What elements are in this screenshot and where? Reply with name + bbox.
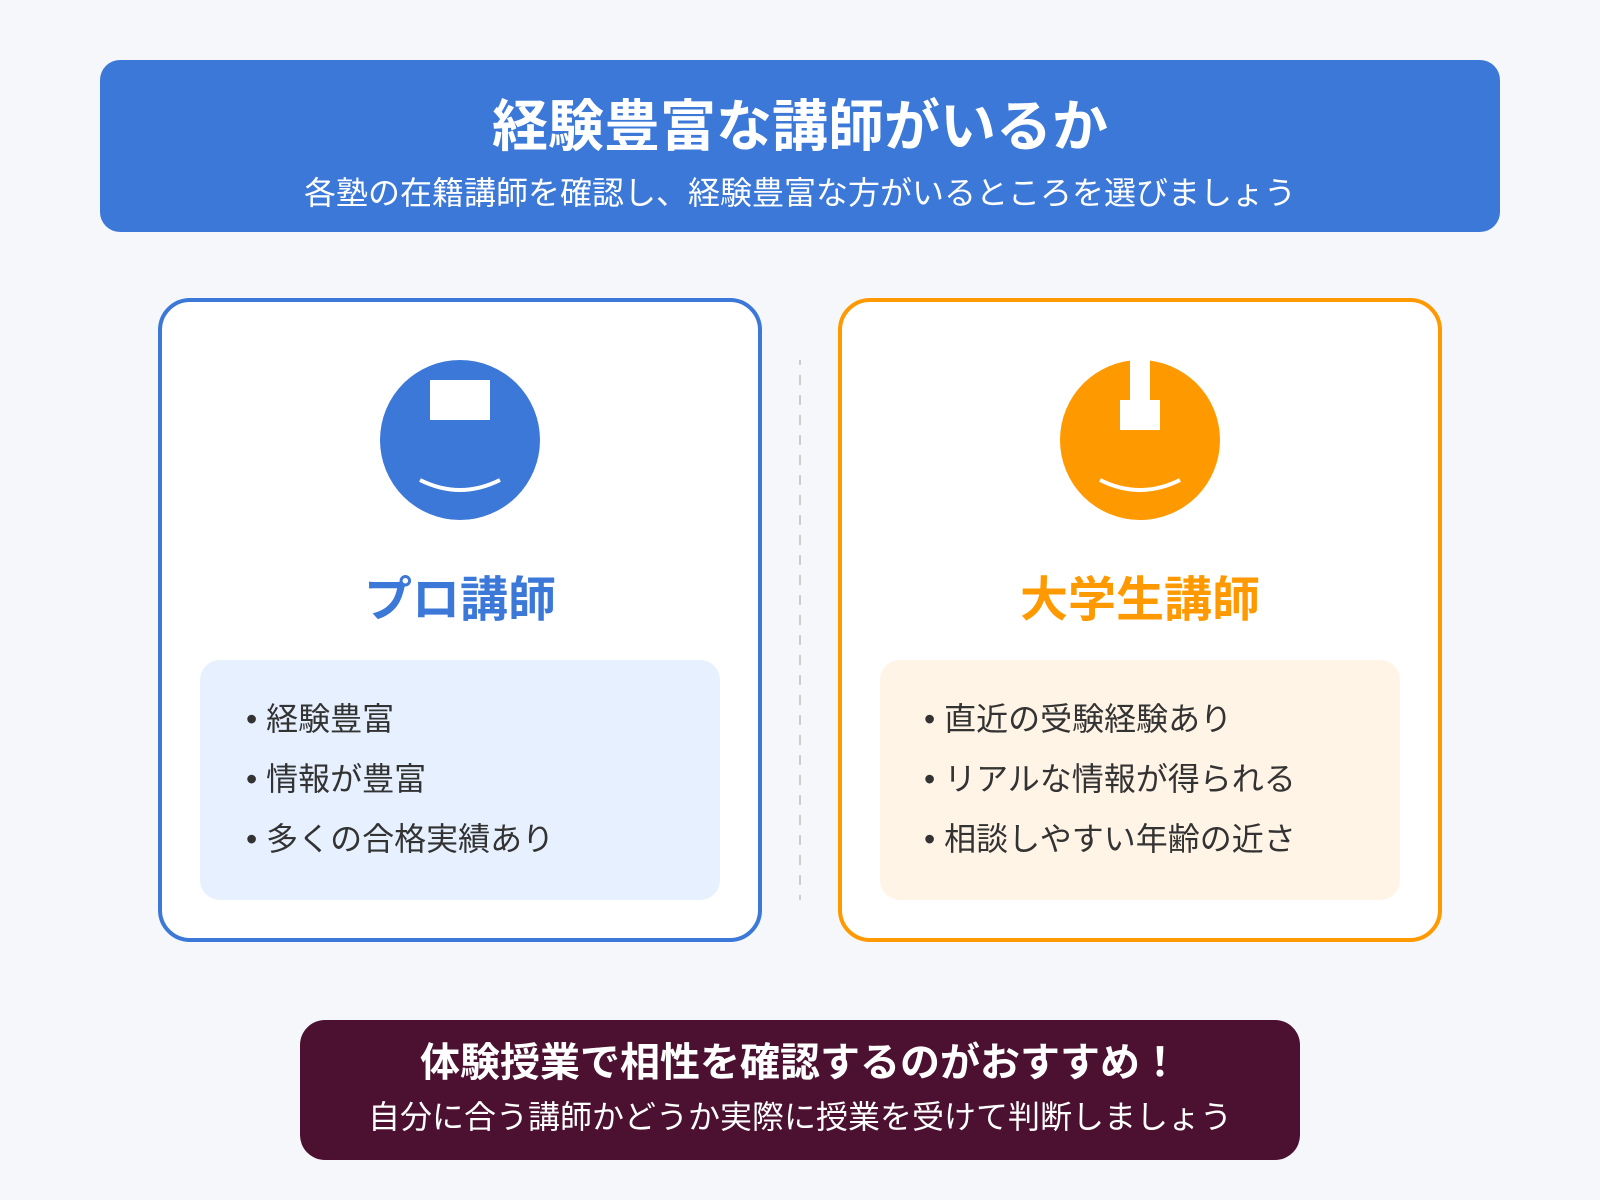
list: student teacher traits: • 相談しやすい年齢の近さ bbox=[924, 821, 1296, 857]
panel: university student teacher bbox=[840, 300, 1440, 940]
title: 経験豊富な講師がいるか bbox=[492, 95, 1108, 158]
divider bbox=[799, 360, 801, 900]
heading: professional teacher: プロ講師 bbox=[364, 574, 556, 627]
list: professional teacher traits: • 経験豊富 bbox=[246, 701, 394, 737]
list: student teacher traits: • 直近の受験経験あり bbox=[924, 701, 1232, 737]
list: professional teacher traits: • 多くの合格実績あり bbox=[246, 821, 554, 857]
panel: professional teacher bbox=[160, 300, 760, 940]
list: professional teacher traits bbox=[200, 660, 720, 900]
callout heading: 体験授業で相性を確認するのがおすすめ！ bbox=[420, 1041, 1180, 1085]
list: professional teacher traits: • 情報が豊富 bbox=[246, 761, 426, 797]
callout: trial lesson bbox=[300, 1020, 1300, 1160]
icon: student teacher face bbox=[1060, 355, 1220, 520]
subtitle: 各塾の在籍講師を確認し、経験豊富な方がいるところを選びましょう bbox=[304, 175, 1296, 211]
list: student teacher traits: • リアルな情報が得られる bbox=[924, 761, 1296, 797]
header banner bbox=[100, 60, 1500, 232]
heading: student teacher: 大学生講師 bbox=[1020, 574, 1260, 627]
list: student teacher traits bbox=[880, 660, 1400, 900]
icon: professional teacher face bbox=[380, 360, 540, 520]
callout text: 自分に合う講師かどうか実際に授業を受けて判断しましょう bbox=[368, 1099, 1232, 1135]
